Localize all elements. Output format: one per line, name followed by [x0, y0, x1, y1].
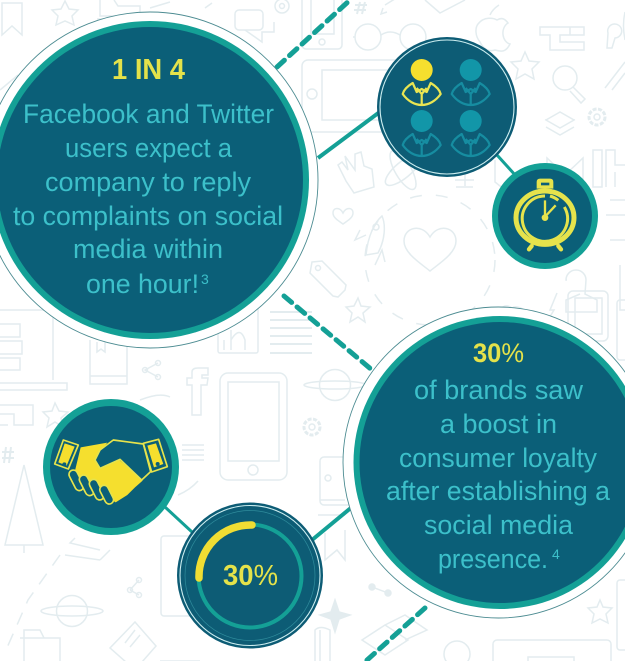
text block: brands loyalty statement: consumer loyalty — [399, 443, 597, 473]
text block: Facebook and Twitter statement — [13, 99, 283, 299]
text block: Facebook and Twitter statement: 3 — [201, 271, 209, 287]
icon: person — [452, 110, 490, 156]
icon: handshake — [55, 439, 167, 506]
label: 30%: 30% — [223, 560, 278, 592]
chart: progress ring — [198, 524, 302, 628]
panel: 1 in 4 statistic circle — [0, 12, 318, 348]
text block: Facebook and Twitter statement: users expect a — [65, 133, 233, 163]
connector: dashed line middle — [284, 296, 372, 370]
panel: 30% brands statistic circle — [343, 307, 625, 618]
panel: 30% progress gauge circle — [177, 502, 323, 648]
heading: 30%: 30% — [473, 338, 524, 368]
panel: alarm clock circle — [492, 163, 598, 269]
text block: brands loyalty statement: 4 — [552, 546, 560, 562]
text block: Facebook and Twitter statement: to complaints on social — [13, 201, 283, 231]
connector: dashed line top — [277, 0, 350, 67]
text block: brands loyalty statement: of brands saw — [414, 375, 584, 405]
text block: brands loyalty statement — [386, 375, 611, 574]
connector: solid lines between circles — [165, 108, 516, 540]
text block: brands loyalty statement: presence. — [438, 544, 548, 574]
icon: alarm clock — [516, 179, 574, 249]
connector: dashed line bottom — [366, 608, 425, 661]
text block: brands loyalty statement: social media — [424, 510, 574, 540]
text block: Facebook and Twitter statement: media within — [73, 234, 223, 264]
text block: Facebook and Twitter statement: company to reply — [45, 167, 251, 197]
text block: Facebook and Twitter statement: Facebook and Twitter — [23, 99, 274, 129]
text block: Facebook and Twitter statement: one hour! — [86, 269, 199, 299]
icon: person — [452, 59, 490, 105]
panel: handshake circle — [43, 399, 179, 535]
panel: people circle, one of four highlighted — [377, 37, 517, 177]
icon: person — [403, 110, 441, 156]
heading: 1 in 4: 1 IN 4 — [112, 54, 185, 86]
text block: brands loyalty statement: after establishing a — [386, 476, 611, 506]
text block: brands loyalty statement: a boost in — [440, 409, 557, 439]
icon: highlighted person — [403, 59, 441, 105]
